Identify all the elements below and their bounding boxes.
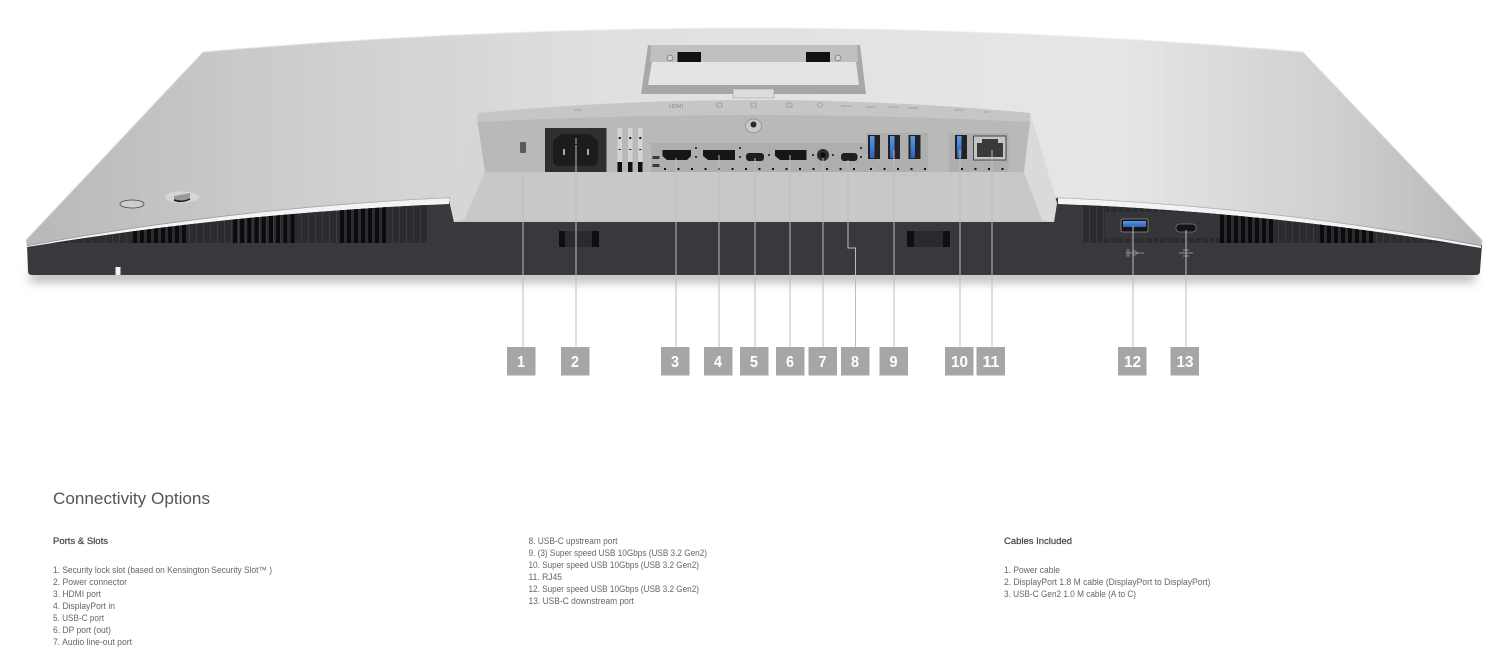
side USB-A port xyxy=(1121,219,1148,232)
cutout right side wall xyxy=(1024,113,1057,222)
security lock slot xyxy=(520,142,526,153)
cutout left side wall xyxy=(449,113,485,222)
list items 8-13: 11. RJ45 xyxy=(528,572,562,582)
badge 13 xyxy=(1170,347,1199,376)
list items 1-7: 1. Security lock slot (based on Kensington Security Slot™ ) xyxy=(53,565,272,575)
list items 1-7 xyxy=(53,565,272,647)
list items 1-7: 4. DisplayPort in xyxy=(53,601,115,611)
DisplayPort in xyxy=(703,150,735,160)
bright panel edge right xyxy=(1058,198,1481,248)
list items 8-13: 9. (3) Super speed USB 10Gbps (USB 3.2 Gen2) xyxy=(528,548,707,558)
badge 2 xyxy=(561,347,590,376)
list items 1-7: 2. Power connector xyxy=(53,577,127,587)
badge 7: 7 xyxy=(818,354,827,371)
USB-A port 10 xyxy=(955,135,967,159)
stand hinge xyxy=(733,89,774,98)
USB icon marks xyxy=(1126,250,1193,256)
drop shadow xyxy=(30,272,1475,282)
audio port xyxy=(817,149,829,161)
badge 4: 4 xyxy=(714,354,722,371)
badge 3 xyxy=(661,347,690,376)
dark lower body xyxy=(27,196,1482,275)
badge 13: 13 xyxy=(1176,354,1194,371)
badge 10 xyxy=(945,347,974,376)
cable items: 2. DisplayPort 1.8 M cable (DisplayPort to DisplayPort) xyxy=(1004,577,1210,587)
list items 8-13: 13. USB-C downstream port xyxy=(528,596,634,606)
band icons xyxy=(574,102,990,112)
list items 8-13: 10. Super speed USB 10Gbps (USB 3.2 Gen2) xyxy=(528,560,699,570)
badge 5 xyxy=(740,347,768,376)
RJ45 port xyxy=(974,136,1006,160)
badge 12: 12 xyxy=(1124,354,1141,371)
badge 9: 9 xyxy=(890,354,898,371)
list items 1-7: 3. HDMI port xyxy=(53,589,101,599)
badge 12 xyxy=(1118,347,1146,376)
cable items xyxy=(1004,565,1210,599)
list items 1-7: 7. Audio line-out port xyxy=(53,637,132,647)
bright panel edge left xyxy=(27,198,449,247)
side USB-C port xyxy=(1176,224,1196,232)
ports subheading: Ports & Slots xyxy=(53,536,109,546)
stand recess xyxy=(641,45,866,94)
USB-A triple xyxy=(868,135,920,159)
badge 3: 3 xyxy=(671,354,679,371)
rear port cutout xyxy=(449,100,1057,222)
small side connectors xyxy=(652,156,660,167)
badge 9 xyxy=(880,347,908,376)
badge 10: 10 xyxy=(951,354,968,371)
left vent strip xyxy=(53,205,427,243)
badge 7 xyxy=(808,347,837,376)
badge 6: 6 xyxy=(786,354,794,371)
list items 1-7: 5. USB-C port xyxy=(53,613,104,623)
silver back panel xyxy=(26,28,1482,246)
cable clip left xyxy=(559,231,599,247)
USB-C port xyxy=(746,153,764,161)
leader lines xyxy=(523,145,1186,348)
status light xyxy=(116,267,120,275)
cutout lip xyxy=(449,100,1057,222)
badge 4 xyxy=(704,347,732,376)
cutout back wall xyxy=(478,115,1030,172)
list items 8-13: 12. Super speed USB 10Gbps (USB 3.2 Gen2) xyxy=(528,584,699,594)
list items 1-7: 6. DP port (out) xyxy=(53,625,111,635)
badge 2: 2 xyxy=(571,354,579,371)
plate perforation upper xyxy=(870,168,926,170)
badge 11: 11 xyxy=(982,354,1000,371)
cable items: 1. Power cable xyxy=(1004,565,1060,575)
cable items: 3. USB-C Gen2 1.0 M cable (A to C) xyxy=(1004,589,1136,599)
badge 1 xyxy=(507,347,536,376)
power button xyxy=(120,200,144,208)
number badges xyxy=(507,347,1199,376)
mounting screw xyxy=(746,119,762,133)
DP port out xyxy=(775,150,806,160)
plate perforation xyxy=(664,168,860,170)
monitor rear view xyxy=(26,28,1482,282)
badge 5: 5 xyxy=(750,354,758,371)
badge 1: 1 xyxy=(517,354,525,371)
cable clip right xyxy=(907,231,950,247)
cables included list xyxy=(1004,536,1210,599)
cables subheading: Cables Included xyxy=(1004,536,1072,546)
badge 6 xyxy=(776,347,804,376)
list items 8-13 xyxy=(528,536,707,606)
badge 8 xyxy=(841,347,870,376)
joystick xyxy=(165,192,199,202)
list items 8-13: 8. USB-C upstream port xyxy=(528,536,618,546)
right vent strip xyxy=(1082,205,1450,243)
port plate xyxy=(651,133,928,172)
right plate perforation xyxy=(961,168,1008,170)
ventilation slots xyxy=(618,128,642,172)
ports and slots list xyxy=(53,536,272,647)
badge 8: 8 xyxy=(851,354,859,371)
heading: Connectivity Options xyxy=(53,489,210,508)
badge 11 xyxy=(976,347,1005,376)
right port plate xyxy=(949,133,1009,172)
plate side perforation xyxy=(695,147,862,158)
USB-C upstream xyxy=(841,153,858,161)
power connector xyxy=(545,128,606,172)
HDMI band label: HDMI xyxy=(669,104,683,110)
cutout floor xyxy=(464,172,1042,220)
HDMI port xyxy=(662,150,691,160)
